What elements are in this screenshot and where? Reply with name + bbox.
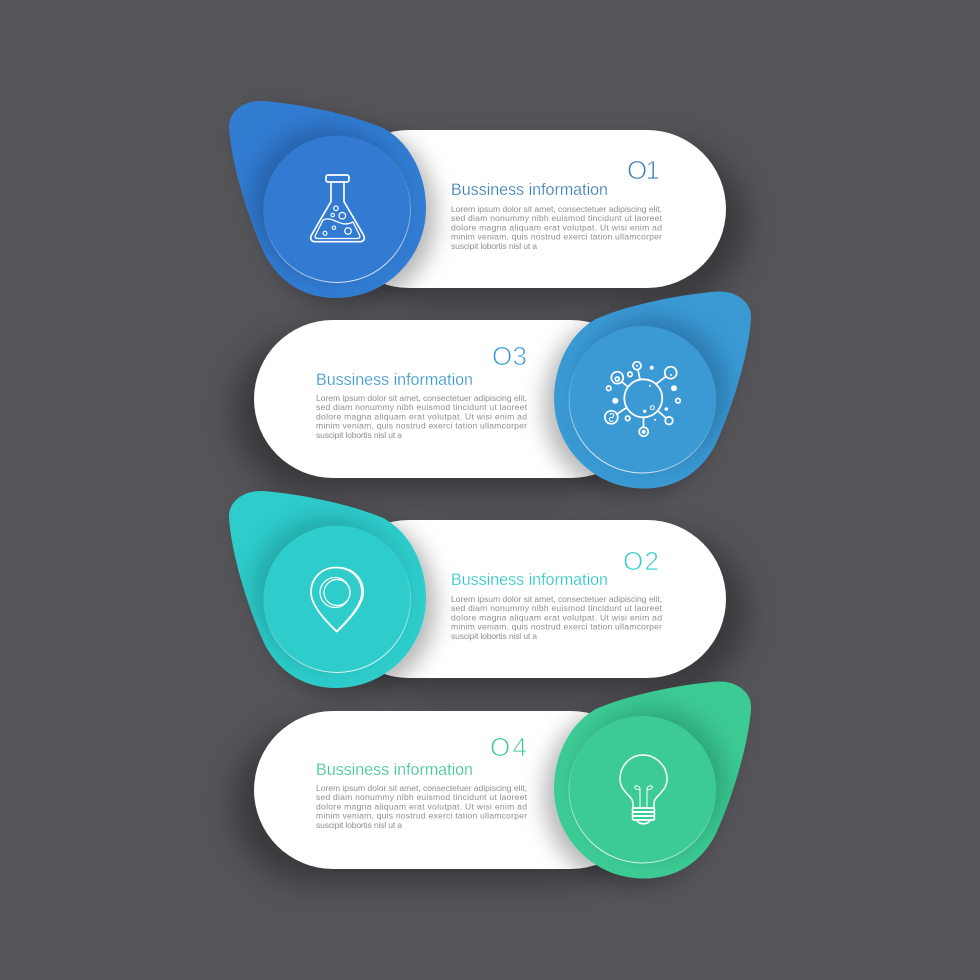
body text: suscipit lobortis nisl ut a	[316, 430, 402, 440]
blob badge	[229, 491, 426, 688]
inner circle	[569, 708, 727, 863]
icon: flask	[311, 175, 364, 242]
blob badge	[554, 681, 751, 878]
body text	[451, 204, 663, 251]
inner circle	[253, 517, 410, 672]
body text: minim veniam, quis nostrud exerci tation ullamcorper	[451, 232, 662, 242]
panel: step 04	[234, 681, 751, 883]
white card	[254, 711, 650, 869]
panel: step 01	[229, 101, 746, 302]
body text: sed diam nonummy nibh euismod tincidunt ut laoreet	[316, 792, 528, 802]
heading: Bussiness information	[316, 371, 473, 389]
body text: Lorem ipsum dolor sit amet, consectetuer adipiscing elit,	[451, 204, 662, 214]
white card	[330, 520, 726, 678]
body text: dolore magna aliquam erat volutpat. Ut wisi enim ad	[316, 801, 527, 811]
panel: step 02	[229, 491, 746, 692]
icon: map pin	[311, 568, 364, 632]
number: O4	[490, 732, 527, 762]
body text: Lorem ipsum dolor sit amet, consectetuer adipiscing elit,	[316, 783, 527, 793]
body text: dolore magna aliquam erat volutpat. Ut wisi enim ad	[451, 612, 662, 622]
number: O2	[623, 546, 659, 576]
heading: Bussiness information	[451, 571, 608, 589]
body text: minim veniam, quis nostrud exerci tation ullamcorper	[316, 811, 527, 821]
body text: Lorem ipsum dolor sit amet, consectetuer adipiscing elit,	[451, 594, 662, 604]
body text: minim veniam, quis nostrud exerci tation ullamcorper	[316, 421, 527, 431]
white card	[330, 130, 726, 288]
body text: sed diam nonummy nibh euismod tincidunt ut laoreet	[316, 402, 528, 412]
body text	[316, 783, 528, 830]
card shadow	[234, 334, 630, 492]
number: O3	[492, 341, 527, 371]
blob badge	[229, 101, 426, 298]
body text: sed diam nonummy nibh euismod tincidunt ut laoreet	[451, 213, 663, 223]
body text: suscipit lobortis nisl ut a	[451, 241, 537, 251]
heading: Bussiness information	[451, 181, 608, 199]
heading: Bussiness information	[316, 761, 473, 779]
body text: suscipit lobortis nisl ut a	[316, 820, 402, 830]
inner circle	[253, 127, 410, 282]
body text: minim veniam, quis nostrud exerci tation ullamcorper	[451, 622, 662, 632]
body text: suscipit lobortis nisl ut a	[451, 631, 537, 641]
body text: dolore magna aliquam erat volutpat. Ut wisi enim ad	[451, 222, 662, 232]
card shadow	[350, 144, 746, 302]
body text	[316, 393, 528, 440]
icon: virus network	[605, 362, 680, 436]
inner circle	[569, 318, 727, 473]
white card	[254, 320, 650, 478]
body text: sed diam nonummy nibh euismod tincidunt ut laoreet	[451, 603, 663, 613]
blob badge	[554, 291, 751, 488]
panel: step 03	[234, 291, 751, 492]
card shadow	[350, 534, 746, 692]
body text: dolore magna aliquam erat volutpat. Ut wisi enim ad	[316, 411, 527, 421]
icon: light bulb	[620, 755, 667, 824]
card shadow	[234, 725, 630, 883]
body text	[451, 594, 663, 641]
number: O1	[627, 155, 660, 185]
body text: Lorem ipsum dolor sit amet, consectetuer adipiscing elit,	[316, 393, 527, 403]
